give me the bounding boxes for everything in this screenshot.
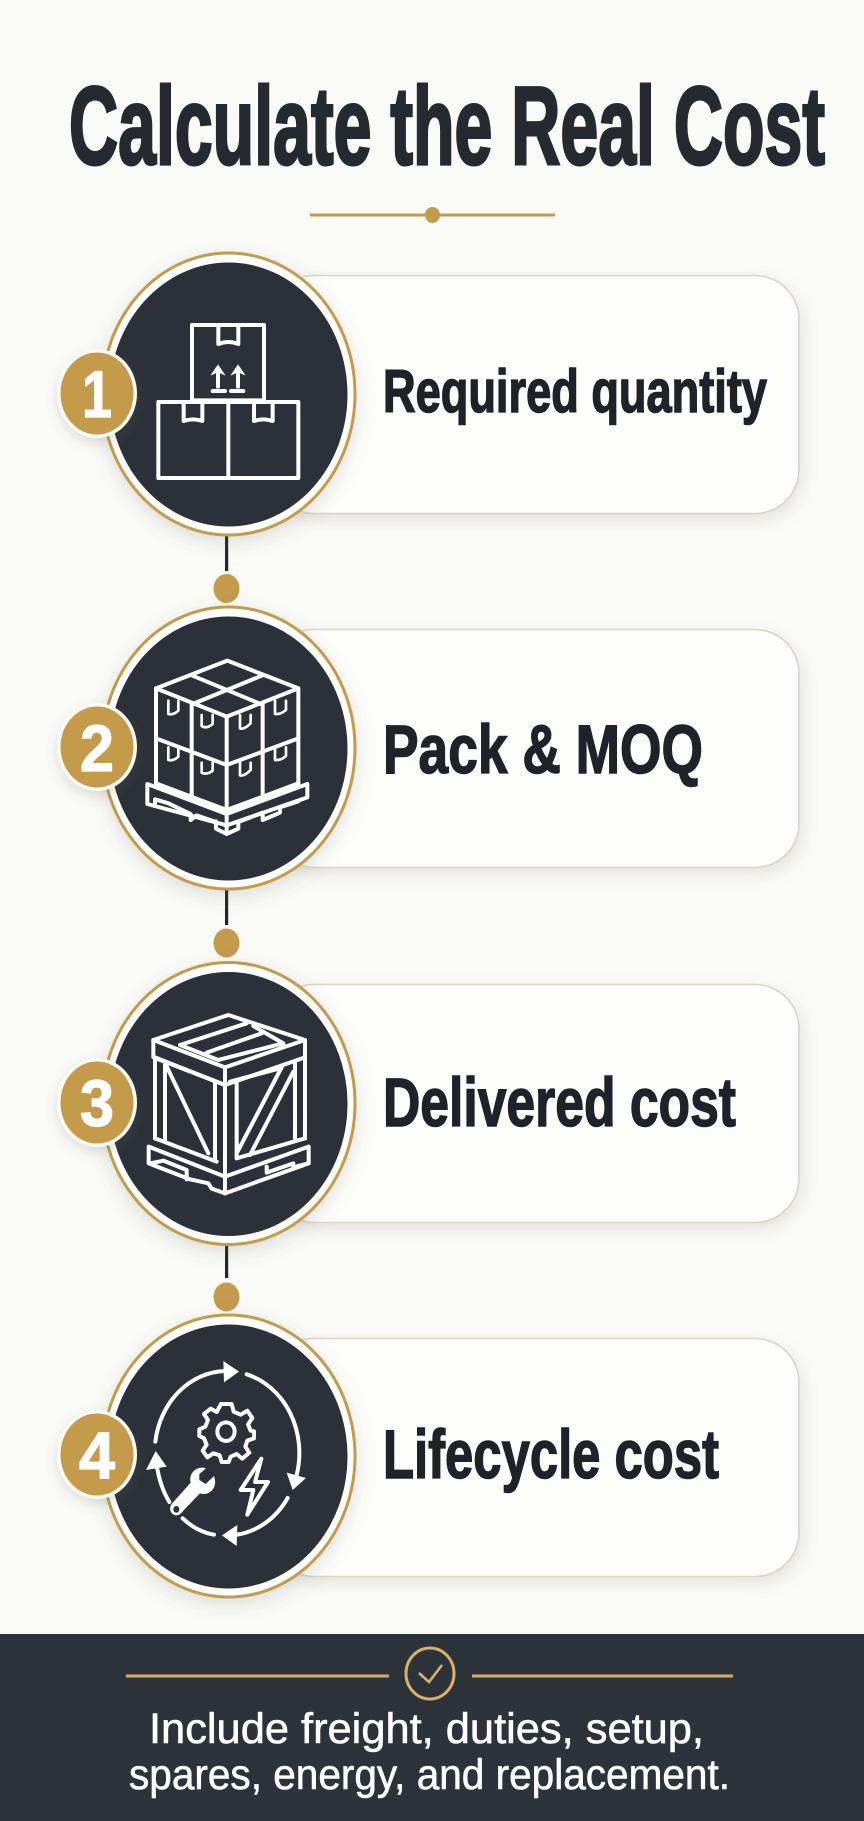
footer text: spares, energy, and replacement. — [129, 1751, 730, 1799]
step 4: lifecycle cost — [57, 1315, 799, 1597]
medallion 3 — [102, 962, 355, 1244]
step 2: pack and MOQ — [57, 607, 799, 889]
medallion 4 — [102, 1315, 355, 1597]
badge 4: 4 — [79, 1418, 115, 1492]
icon: lifecycle loop with gear, wrench and bolt — [146, 1361, 306, 1546]
badge 1: 1 — [82, 357, 112, 431]
card 1 — [270, 276, 799, 514]
title divider — [310, 207, 555, 223]
card 3 label: Delivered cost — [383, 1064, 736, 1141]
step 3: delivered cost — [57, 962, 799, 1244]
medallion 1 — [102, 253, 355, 535]
icon: check in circle — [406, 1648, 454, 1699]
step 1: required quantity — [57, 253, 799, 535]
connector 2 — [214, 889, 240, 958]
badge 4 — [57, 1410, 137, 1499]
badge 2 — [57, 703, 137, 791]
card 4 — [270, 1338, 799, 1576]
footer band — [0, 1634, 864, 1821]
card 3 — [270, 984, 799, 1222]
footer rule — [126, 1674, 733, 1678]
icon: stacked boxes — [158, 325, 298, 478]
badge 3 — [57, 1058, 137, 1147]
card 4 label: Lifecycle cost — [383, 1416, 719, 1493]
medallion 2 — [102, 607, 355, 889]
card 2 label: Pack & MOQ — [383, 711, 703, 788]
badge 3: 3 — [80, 1066, 114, 1140]
card 2 — [270, 630, 799, 868]
footer text — [129, 1705, 730, 1799]
icon: palletised boxes — [147, 661, 307, 834]
badge 2: 2 — [80, 711, 114, 785]
badge 1 — [57, 349, 137, 438]
icon: wooden crate — [149, 1015, 309, 1193]
connector 3 — [214, 1244, 240, 1312]
connector 1 — [214, 535, 240, 603]
footer text: Include freight, duties, setup, — [149, 1705, 704, 1753]
